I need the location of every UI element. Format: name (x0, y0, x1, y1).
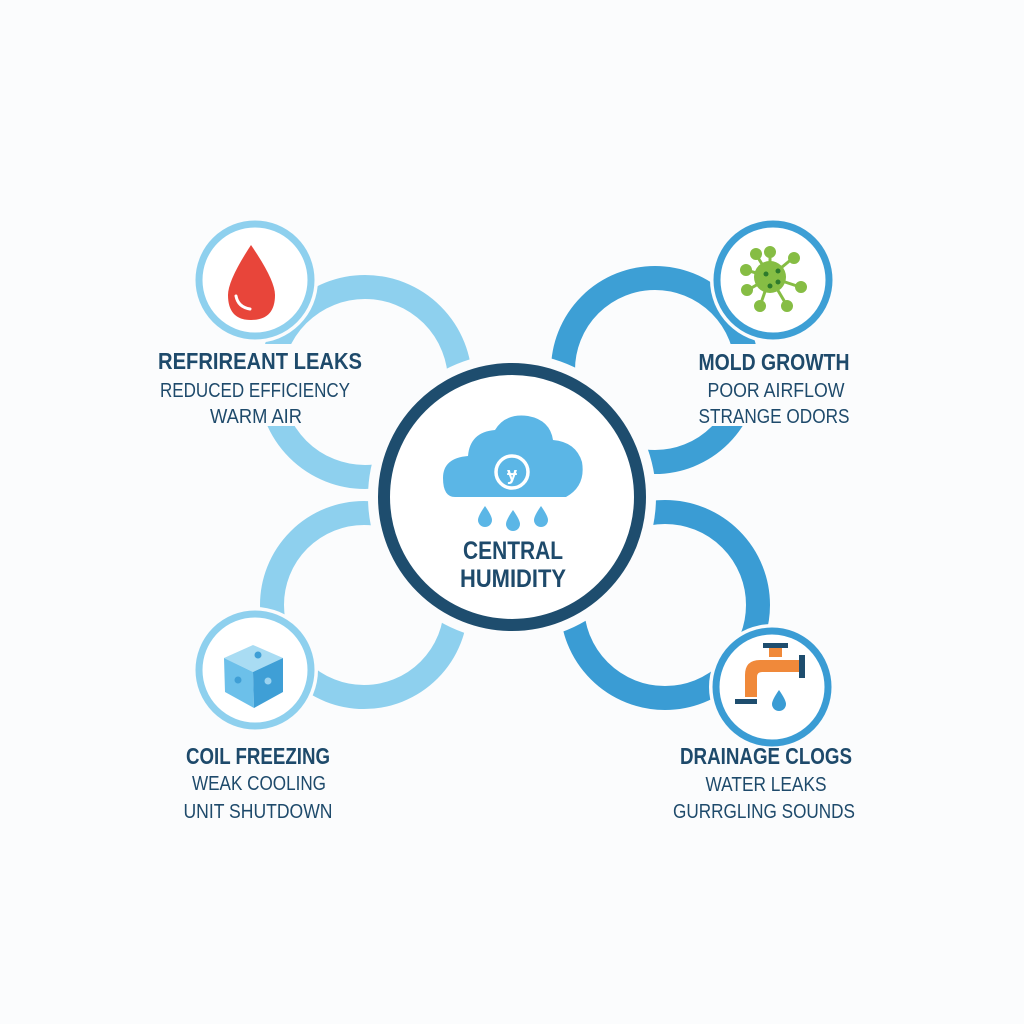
icon: mold spore (710, 217, 836, 343)
text: coil freezing: UNIT SHUTDOWN (184, 801, 332, 823)
text: refrigerant leaks: REDUCED EFFICIENCY (160, 380, 350, 402)
icon: ice cube (192, 607, 318, 733)
icon: faucet (709, 624, 835, 750)
node: coil freezing (184, 607, 332, 823)
text: mold growth: STRANGE ODORS (698, 406, 850, 428)
text: refrigerant leaks (155, 344, 365, 428)
text: coil freezing (184, 743, 332, 823)
node: mold growth (690, 217, 860, 428)
text: drainage clogs: GURRGLING SOUNDS (673, 801, 855, 823)
node: refrigerant leaks (155, 217, 365, 428)
text: drainage clogs (673, 743, 855, 823)
node: drainage clogs (673, 624, 855, 823)
text: drainage clogs: DRAINAGE CLOGS (680, 743, 852, 769)
arc: bottom-left connector (272, 513, 456, 697)
hub label: CENTRAL (463, 537, 563, 565)
icon: red drop (192, 217, 318, 343)
text: refrigerant leaks: REFRIREANT LEAKS (158, 348, 362, 374)
icon: cloud with rain: ɏ (507, 464, 517, 484)
text: mold growth: MOLD GROWTH (698, 349, 850, 375)
text: coil freezing: COIL FREEZING (186, 743, 330, 769)
hub label: HUMIDITY (460, 565, 566, 593)
text: mold growth (690, 344, 860, 428)
hub label (460, 537, 566, 593)
central hub (368, 353, 656, 641)
arc: top-right connector (563, 278, 747, 462)
text: refrigerant leaks: WARM AIR (210, 406, 302, 428)
icon: cloud with rain (443, 416, 583, 531)
text: coil freezing: WEAK COOLING (192, 773, 326, 795)
arc: bottom-right connector (572, 512, 758, 698)
arc: top-left connector (270, 287, 460, 477)
text: mold growth: POOR AIRFLOW (708, 380, 845, 402)
text: drainage clogs: WATER LEAKS (706, 774, 826, 796)
